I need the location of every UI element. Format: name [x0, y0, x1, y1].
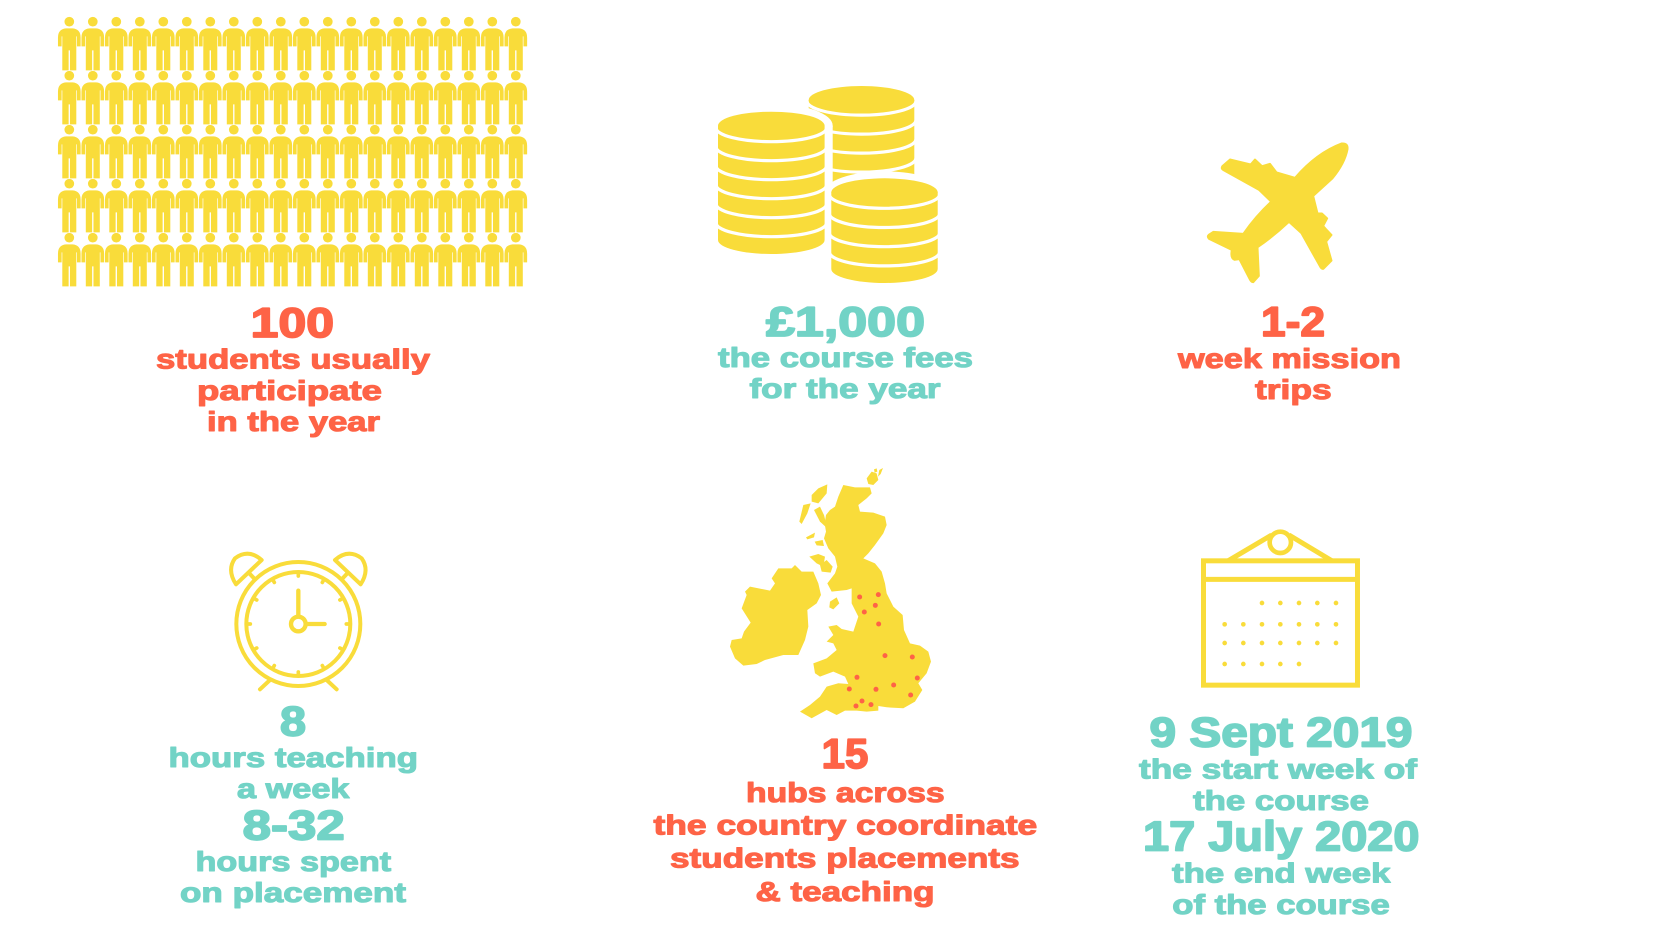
stat: teaching and placement hours: on placement	[180, 877, 406, 908]
stat: course fees: the course fees	[718, 342, 973, 373]
stat: teaching and placement hours: a week	[237, 773, 350, 804]
stat: 100 students	[156, 299, 431, 437]
panel: course fees	[710, 86, 973, 404]
stat: course dates: of the course	[1172, 889, 1390, 920]
icon: map of the UK and Ireland with hub dots	[730, 468, 931, 718]
icon: wall calendar	[1203, 532, 1358, 685]
stat: teaching and placement hours: hours teaching	[168, 742, 418, 773]
stat: mission trips	[1177, 298, 1401, 405]
stat: mission trips: 1-2	[1261, 298, 1325, 345]
stat: hubs	[654, 730, 1037, 907]
icon: coin stacks	[710, 86, 944, 292]
stat: mission trips: week mission	[1177, 343, 1401, 374]
panel: mission trips	[1177, 143, 1401, 405]
panel: students	[58, 17, 527, 437]
stat: mission trips: trips	[1255, 374, 1332, 405]
panel: teaching hours	[168, 554, 418, 908]
stat: teaching and placement hours	[168, 697, 418, 908]
panel: course dates	[1139, 532, 1420, 920]
icon: airplane	[1208, 143, 1348, 282]
stat: course dates: the end week	[1172, 858, 1391, 888]
stat: course dates: 9 Sept 2019	[1150, 709, 1412, 756]
stat: 100 students: in the year	[207, 406, 380, 437]
stat: course dates: the start week of	[1139, 754, 1418, 784]
icon: alarm clock	[231, 554, 366, 689]
stat: hubs: the country coordinate	[654, 810, 1037, 840]
stat: hubs: & teaching	[756, 876, 934, 907]
stat: course fees	[718, 298, 973, 404]
panel: hubs	[654, 468, 1037, 907]
stat: course dates	[1139, 709, 1420, 920]
stat: course fees: for the year	[750, 373, 941, 404]
stat: course fees: £1,000	[766, 298, 925, 345]
icon: crowd of 100 people	[58, 17, 527, 286]
stat: 100 students: participate	[197, 375, 382, 406]
stat: 100 students: students usually	[156, 343, 431, 374]
stat: teaching and placement hours: hours spent	[196, 846, 391, 877]
stat: teaching and placement hours: 8	[280, 697, 306, 744]
stat: course dates: 17 July 2020	[1143, 813, 1420, 860]
stat: hubs: 15	[822, 730, 868, 777]
stat: hubs: hubs across	[746, 777, 945, 808]
stat: teaching and placement hours: 8-32	[243, 801, 345, 848]
stat: hubs: students placements	[670, 842, 1020, 874]
stat: course dates: the course	[1193, 785, 1369, 816]
stat: 100 students: 100	[251, 299, 334, 346]
